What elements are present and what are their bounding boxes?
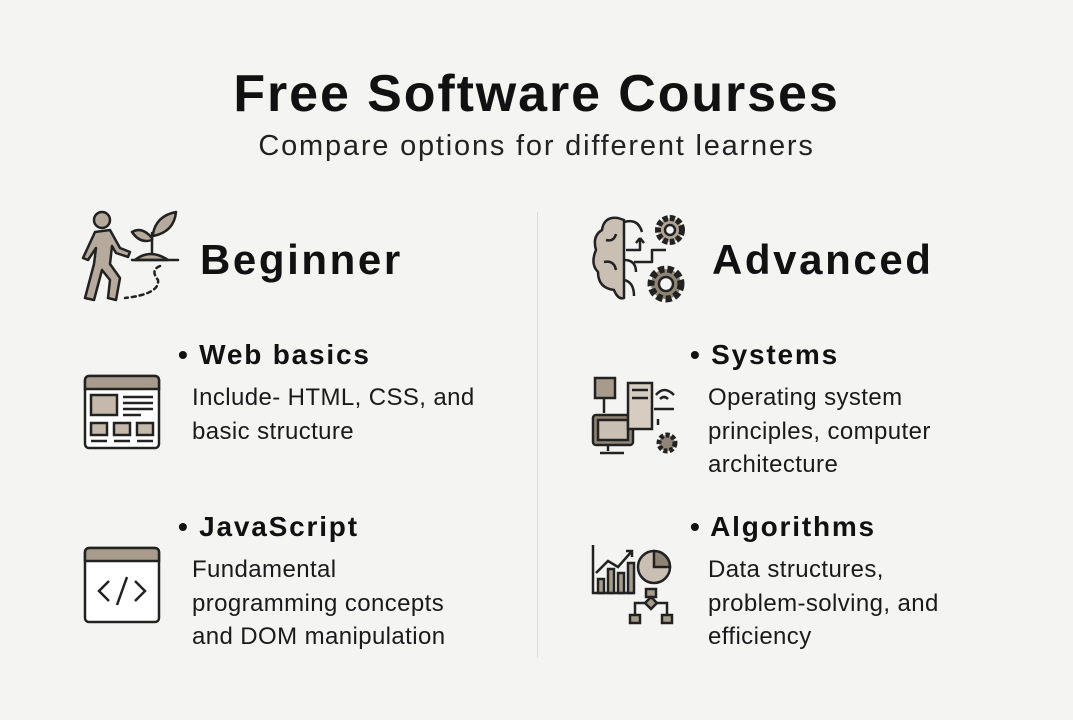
description: Operating system — [708, 384, 902, 411]
icon: walker and sprout — [82, 210, 180, 302]
item: Algorithms — [592, 511, 939, 650]
description — [192, 384, 475, 444]
bullet heading: • JavaScript — [178, 511, 359, 542]
subtitle: Compare options for different learners — [258, 130, 815, 162]
description: Fundamental — [192, 556, 336, 583]
bullet heading: • Web basics — [178, 339, 371, 370]
item: JavaScript — [84, 511, 445, 650]
icon: code window — [84, 546, 160, 624]
description — [708, 556, 939, 650]
icon: brain and gears — [592, 215, 685, 302]
description: architecture — [708, 451, 838, 478]
description — [708, 384, 931, 478]
bullet heading: • Systems — [690, 339, 839, 370]
bullet heading: • Algorithms — [690, 511, 876, 542]
title: Free Software Courses — [233, 65, 840, 123]
heading: Advanced: Advanced — [712, 236, 934, 283]
icon: charts and flowchart — [592, 545, 674, 624]
description: programming concepts — [192, 590, 444, 616]
item: Systems — [592, 339, 931, 478]
description: and DOM manipulation — [192, 623, 445, 650]
icon: computer system — [592, 376, 678, 454]
description: Include- HTML, CSS, and — [192, 384, 475, 411]
description: principles, computer — [708, 418, 931, 444]
heading: Beginner: Beginner — [200, 236, 403, 283]
description — [192, 556, 445, 650]
description: problem-solving, and — [708, 590, 939, 616]
item: Web basics — [84, 339, 475, 450]
description: Data structures, — [708, 556, 884, 583]
icon: web layout — [84, 374, 160, 450]
description: efficiency — [708, 623, 812, 650]
description: basic structure — [192, 418, 354, 444]
